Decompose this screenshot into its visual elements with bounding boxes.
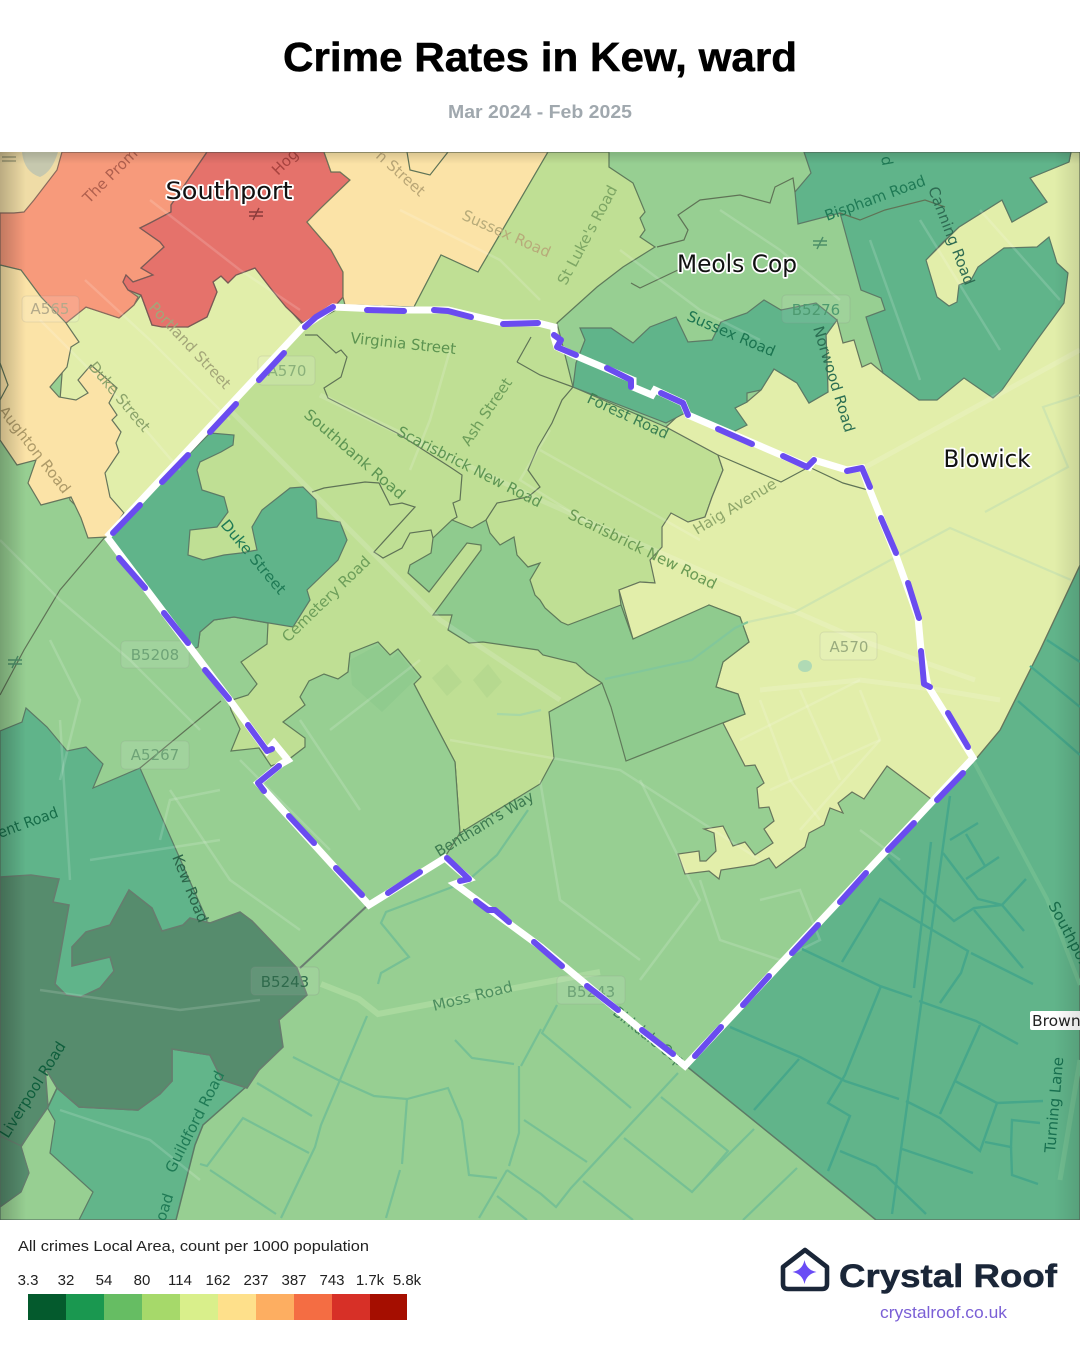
region: patch inside south-west ward <box>350 645 418 712</box>
road labels: Sussex Road <box>459 206 553 261</box>
rail stations <box>2 157 827 668</box>
place label: Southport: Southport <box>166 177 292 205</box>
shield: A565: A565 <box>31 300 69 318</box>
legend tick labels: 5.8k <box>393 1272 422 1289</box>
region: darkest green Birkdale <box>0 875 307 1146</box>
shield: A5267 <box>121 741 189 769</box>
road labels: Hog <box>268 145 302 179</box>
title: Crime Rates in Kew, ward <box>283 34 797 80</box>
region: beach top left <box>0 152 62 213</box>
region: Blowick pale yellow <box>619 152 1080 879</box>
road labels: St Luke's Road <box>554 182 621 288</box>
legend tick labels: 387 <box>281 1272 307 1289</box>
road labels <box>0 145 1080 1223</box>
subtitle: date range: Mar 2024 - Feb 2025 <box>448 101 632 122</box>
road labels: Guildford Road <box>162 1068 228 1176</box>
legend colour scale <box>28 1294 407 1320</box>
place label: Brown: Brown <box>1032 1012 1080 1030</box>
ward boundary: white base <box>107 307 973 1066</box>
region: south-west ward medium green <box>282 641 460 855</box>
legend tick labels: 237 <box>243 1272 269 1289</box>
choropleth map <box>0 145 1080 1223</box>
shield: B5243 south <box>557 976 625 1004</box>
region: north-west pale yellow <box>60 268 303 537</box>
shield: A565 <box>22 296 79 322</box>
region: tan west <box>0 265 124 538</box>
road labels: Duke Street <box>85 358 154 436</box>
shield: B5243 south: B5243 <box>567 983 615 1001</box>
shield: B5276 <box>782 295 850 323</box>
road labels: Ash Street <box>457 374 516 449</box>
legend title: All crimes Local Area, count per 1000 population <box>18 1238 369 1255</box>
road labels: Canning Road <box>924 184 978 288</box>
legend tick labels: 80 <box>134 1272 150 1289</box>
region: south-east dark green <box>685 565 1080 1220</box>
pond <box>798 660 812 672</box>
road labels: Scarisbrick New Road <box>565 505 720 593</box>
ward boundary: purple dashes <box>113 307 968 1056</box>
road shields <box>22 295 877 1004</box>
map edge shading <box>0 152 1080 1220</box>
road labels: Scarisbrick New Road <box>394 423 545 511</box>
region: tan north-east of town <box>307 152 548 307</box>
road labels: Duke Street <box>217 516 290 598</box>
road labels: Norwood Road <box>809 324 859 434</box>
road labels: Sussex Road <box>684 307 778 360</box>
road labels: Southbank Road <box>300 405 409 503</box>
region: Kew building blocks <box>432 664 502 698</box>
streets: south-east dark area <box>730 640 1080 1214</box>
light streets <box>0 200 1080 1180</box>
legend tick labels: 3.3 <box>18 1272 38 1289</box>
region: red town centre <box>123 152 350 327</box>
shield: A570 north <box>258 356 315 385</box>
road labels: Kew Road <box>168 852 212 925</box>
region: west ward medium green <box>191 617 268 701</box>
road labels: d <box>877 155 896 167</box>
legend <box>18 1238 422 1320</box>
road labels: Virginia Street <box>350 329 457 358</box>
shield: B5243 west <box>251 967 319 995</box>
shield: A570 east <box>820 632 877 660</box>
legend tick labels: 743 <box>319 1272 345 1289</box>
road labels: The Prom <box>78 145 141 208</box>
logo wordmark: Crystal Roof <box>839 1258 1057 1294</box>
region: south-west dark green <box>48 1050 246 1220</box>
legend tick labels: 1.7k <box>356 1272 385 1289</box>
region: Duke Street dark green <box>107 433 347 650</box>
boundary: thick grey edges <box>300 905 368 968</box>
region: north-east dark green <box>795 152 1071 400</box>
road labels: Bentham's Way <box>432 787 537 860</box>
legend tick labels: 54 <box>96 1272 112 1289</box>
legend tick labels: 162 <box>205 1272 231 1289</box>
shield: B5208 <box>121 641 189 668</box>
road labels: Forest Road <box>584 389 672 443</box>
road labels: Bispham Road <box>822 172 928 225</box>
boundary lines <box>0 152 945 768</box>
legend tick labels: 114 <box>168 1272 192 1289</box>
website url: crystalroof.co.uk <box>880 1304 1008 1322</box>
road labels: oad <box>152 1191 177 1223</box>
logo: Crystal Roof <box>783 1250 1057 1322</box>
region: south-west pocket <box>0 1107 93 1220</box>
region: central medium green <box>408 520 749 761</box>
icon: house with star <box>783 1250 827 1289</box>
shield: A570 east: A570 <box>830 638 868 656</box>
shield: B5243 west: B5243 <box>261 973 309 991</box>
legend tick labels <box>18 1272 422 1289</box>
road: Moss Road <box>321 972 600 1014</box>
region: darkest green bottom left <box>0 1136 29 1207</box>
road labels: Turning Lane <box>1041 1056 1067 1154</box>
region: Sussex Road dark green <box>573 300 837 432</box>
place label: Meols Cop: Meols Cop <box>677 250 797 278</box>
region: Kew yellow-green <box>188 152 722 834</box>
road labels: Birkdale Cop <box>610 1003 688 1070</box>
road labels: Cemetery Road <box>278 552 374 646</box>
shield: A5267: A5267 <box>131 746 179 764</box>
region: salmon town <box>0 152 207 323</box>
road labels: n Street <box>372 147 429 200</box>
shield: B5208: B5208 <box>131 646 179 664</box>
shield: A570 north: A570 <box>268 362 306 380</box>
shield: B5276: B5276 <box>792 301 840 319</box>
streets: south medium area <box>200 395 1080 1220</box>
road labels: Haig Avenue <box>690 475 780 538</box>
road labels: Portland Street <box>145 298 235 393</box>
legend tick labels: 32 <box>58 1272 74 1289</box>
road labels: Moss Road <box>431 978 515 1015</box>
region: west dark green <box>0 708 207 1000</box>
place label: Blowick: Blowick <box>944 445 1031 473</box>
